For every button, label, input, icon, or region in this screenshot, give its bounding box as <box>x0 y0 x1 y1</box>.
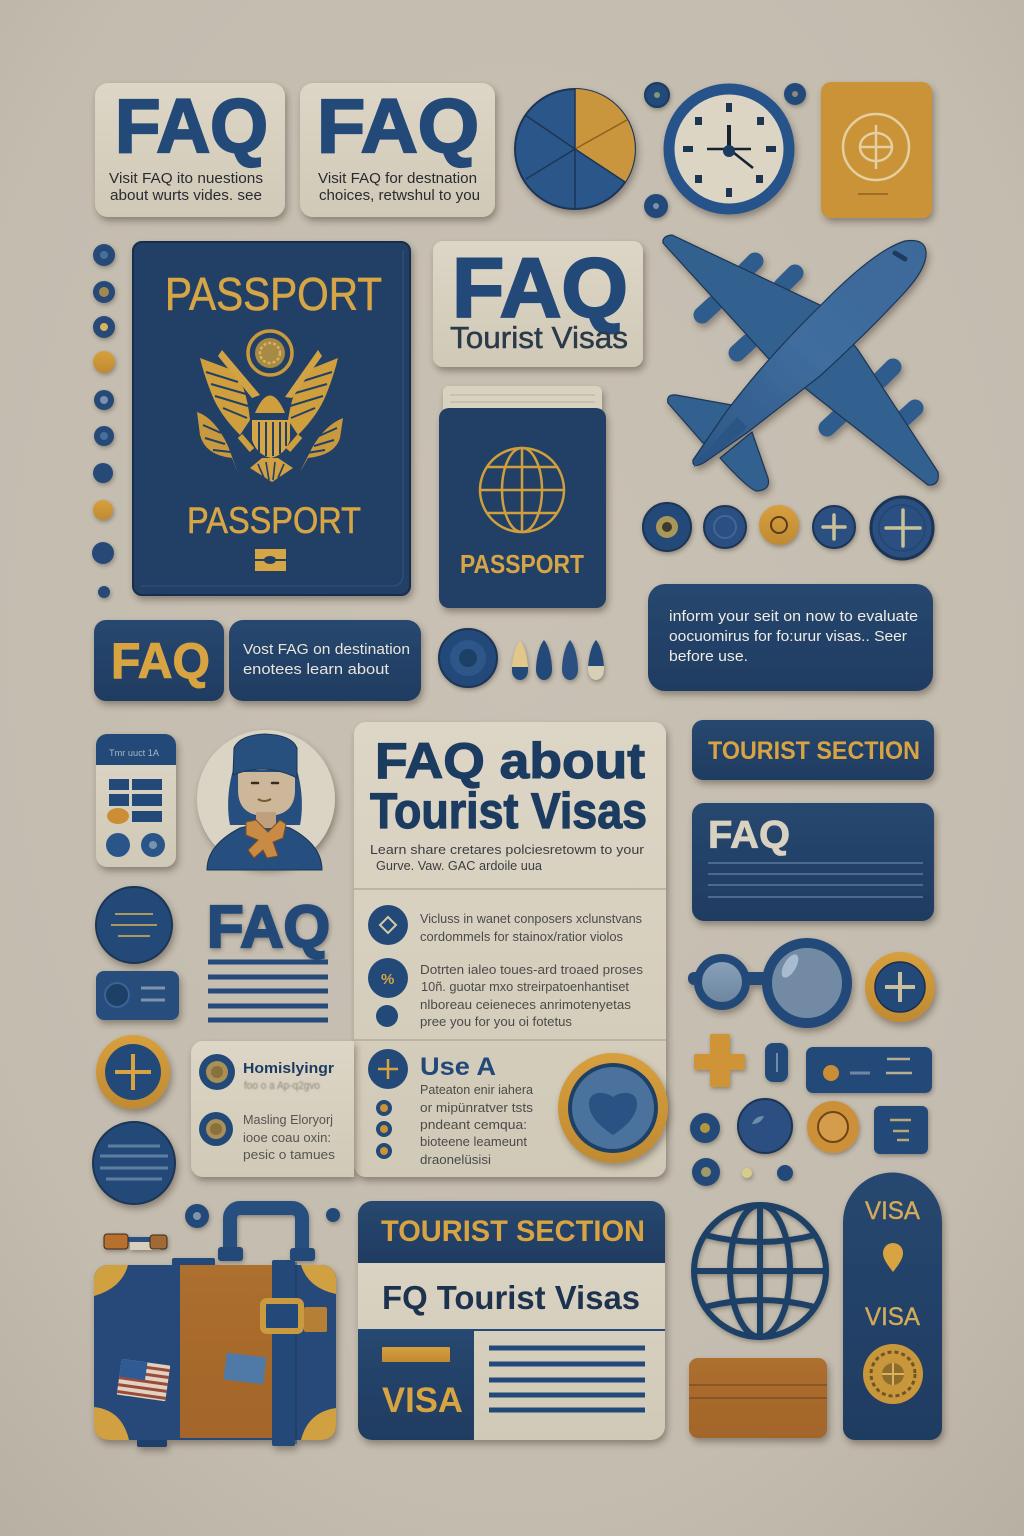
icon: lens and capsules <box>439 629 604 687</box>
FAQ heading two: FAQ <box>317 84 479 169</box>
icon: airplane <box>663 235 938 491</box>
icon: gold cross <box>694 1034 745 1087</box>
bullet dots <box>376 1100 392 1159</box>
destination note: Vost FAG on destination <box>243 641 410 658</box>
Tourist Visas label: Tourist Visas <box>450 320 628 355</box>
item one text: cordommels for stainox/ratior violos <box>420 930 623 944</box>
icon: phone card <box>96 734 176 867</box>
main intro text: Gurve. Vaw. GAC ardoile uua <box>376 858 543 873</box>
icon: gold passport <box>821 82 932 218</box>
FAQ two body text: choices, retwshul to you <box>319 188 480 204</box>
FAQ heading three: FAQ <box>452 241 628 335</box>
dark info card <box>648 584 933 691</box>
flag sticker <box>117 1359 170 1401</box>
main title: Tourist Visas <box>370 783 647 839</box>
heart button <box>558 1053 668 1163</box>
item two text: pree you for you oi fotetus <box>420 1015 572 1029</box>
blue sticker <box>223 1353 266 1384</box>
icon: plain dot <box>376 1005 398 1027</box>
tourist visa card <box>358 1201 665 1440</box>
FAQ gold button <box>94 620 224 701</box>
lower left panel <box>191 1041 354 1177</box>
big passport <box>133 242 410 595</box>
icon: plus ring <box>865 952 935 1022</box>
item two text: Dotrten ialeo toues-ard troaed proses <box>420 963 643 977</box>
icon: ring two <box>199 1112 233 1146</box>
item one text: Vicluss in wanet conposers xclunstvans <box>420 912 642 926</box>
icon: suitcase <box>94 1204 340 1447</box>
tourist section tab: TOURIST SECTION <box>708 737 920 765</box>
destination note: enotees learn about <box>243 661 390 678</box>
item three text: or mipünratver tsts <box>420 1101 533 1115</box>
main title <box>370 733 647 839</box>
FAQ gold button: FAQ <box>111 633 210 689</box>
main FAQ panel <box>354 722 666 1177</box>
FAQ one body text: about wurts vides. see <box>110 188 262 204</box>
suitcase body <box>94 1258 336 1447</box>
passport subtitle: PASSPORT <box>187 500 361 541</box>
blurred line: foo o a Ap-q2gvo <box>244 1080 320 1092</box>
main title: FAQ about <box>375 733 645 789</box>
icon: location pin <box>883 1243 903 1272</box>
FAQ two body text <box>318 171 480 204</box>
FAQ two body text: Visit FAQ for destnation <box>318 171 477 187</box>
suitcase handle <box>218 1208 315 1261</box>
tourist section heading: TOURIST SECTION <box>381 1215 645 1248</box>
icon: phone card: Tmr uuct 1A <box>109 748 159 758</box>
FAQ with lines <box>207 894 330 1020</box>
item three text: pndeant cemqua: <box>420 1118 527 1132</box>
card: FAQ one <box>95 83 285 217</box>
visa stub <box>358 1330 474 1440</box>
card: FAQ two <box>300 83 495 217</box>
visa tab <box>843 1172 942 1440</box>
FAQ heading one: FAQ <box>115 84 268 169</box>
icon: lined circle <box>96 887 172 963</box>
small passport <box>439 386 606 608</box>
small passport label: PASSPORT <box>460 549 584 579</box>
small icon cluster <box>690 1099 928 1186</box>
item three text: draonelüsisi <box>420 1153 491 1167</box>
icon: globe <box>694 1205 826 1337</box>
icon: gold plus <box>96 1035 170 1109</box>
icon: toggle card <box>96 971 179 1020</box>
FAQ lined card <box>692 803 934 921</box>
tourist visas heading: FQ Tourist Visas <box>382 1279 640 1316</box>
icon: gold medallion <box>863 1344 923 1404</box>
item two text <box>420 963 643 1029</box>
card: FAQ Tourist Visas <box>433 241 643 367</box>
visa label top: VISA <box>865 1197 920 1225</box>
icon: brown wallet <box>689 1358 827 1438</box>
item two text: 10ñ. guotar mxo streirpatoenhantiset <box>421 980 630 994</box>
passport title: PASSPORT <box>165 268 382 320</box>
icon: passport chip <box>255 549 286 571</box>
avatar <box>197 730 335 870</box>
luggage tag <box>104 1234 167 1250</box>
item three text <box>420 1083 533 1167</box>
item three text: bioteene leameunt <box>420 1135 528 1149</box>
text lines <box>489 1348 645 1410</box>
icon: pie chart <box>515 89 635 209</box>
FAQ one body text <box>109 171 263 204</box>
visa stub: VISA <box>382 1381 463 1420</box>
panel body: Masling Eloryorj <box>243 1112 333 1127</box>
item one text <box>420 912 642 944</box>
icon: percent badge <box>368 958 408 998</box>
icon: plus badge <box>368 1049 408 1089</box>
destination note <box>229 620 421 701</box>
icon: striped circle <box>93 1122 175 1204</box>
Use A heading: Use A <box>420 1053 496 1081</box>
item three text: Pateaton enir iahera <box>420 1083 533 1097</box>
tourist section tab <box>692 720 934 780</box>
item two text: nlboreau ceieneces anrimotenyetas <box>420 998 631 1012</box>
panel body: pesic o tamues <box>243 1147 336 1162</box>
icon: percent badge: % <box>381 971 394 988</box>
icon: ring one <box>199 1054 235 1090</box>
icon: pill <box>765 1043 788 1082</box>
panel heading: Homislyingr <box>243 1061 334 1077</box>
visa label bottom: VISA <box>865 1303 920 1331</box>
row of round buttons <box>643 497 933 559</box>
panel body: iooe coau oxin: <box>243 1130 331 1145</box>
FAQ one body text: Visit FAQ ito nuestions <box>109 171 263 187</box>
info card text: before use. <box>669 648 748 665</box>
info card text: oocuomirus for fo:urur visas.. Seer <box>669 628 907 645</box>
panel body <box>243 1112 336 1162</box>
icon: clock with dots <box>644 83 806 218</box>
FAQ lined card: FAQ <box>708 814 790 857</box>
column of dots <box>92 244 115 598</box>
main intro text: Learn share cretares polciesretowm to your <box>370 842 645 857</box>
icon: gold eagle emblem <box>197 331 343 482</box>
icon: glasses <box>688 943 847 1023</box>
icon: diamond badge <box>368 905 408 945</box>
left column icons <box>93 887 179 1204</box>
icon: slider card <box>806 1047 932 1093</box>
icon: gold globe <box>480 448 564 532</box>
main intro text <box>370 842 645 873</box>
info card text <box>669 608 918 665</box>
FAQ with lines: FAQ <box>207 894 330 960</box>
info card text: inform your seit on now to evaluate <box>669 608 918 625</box>
